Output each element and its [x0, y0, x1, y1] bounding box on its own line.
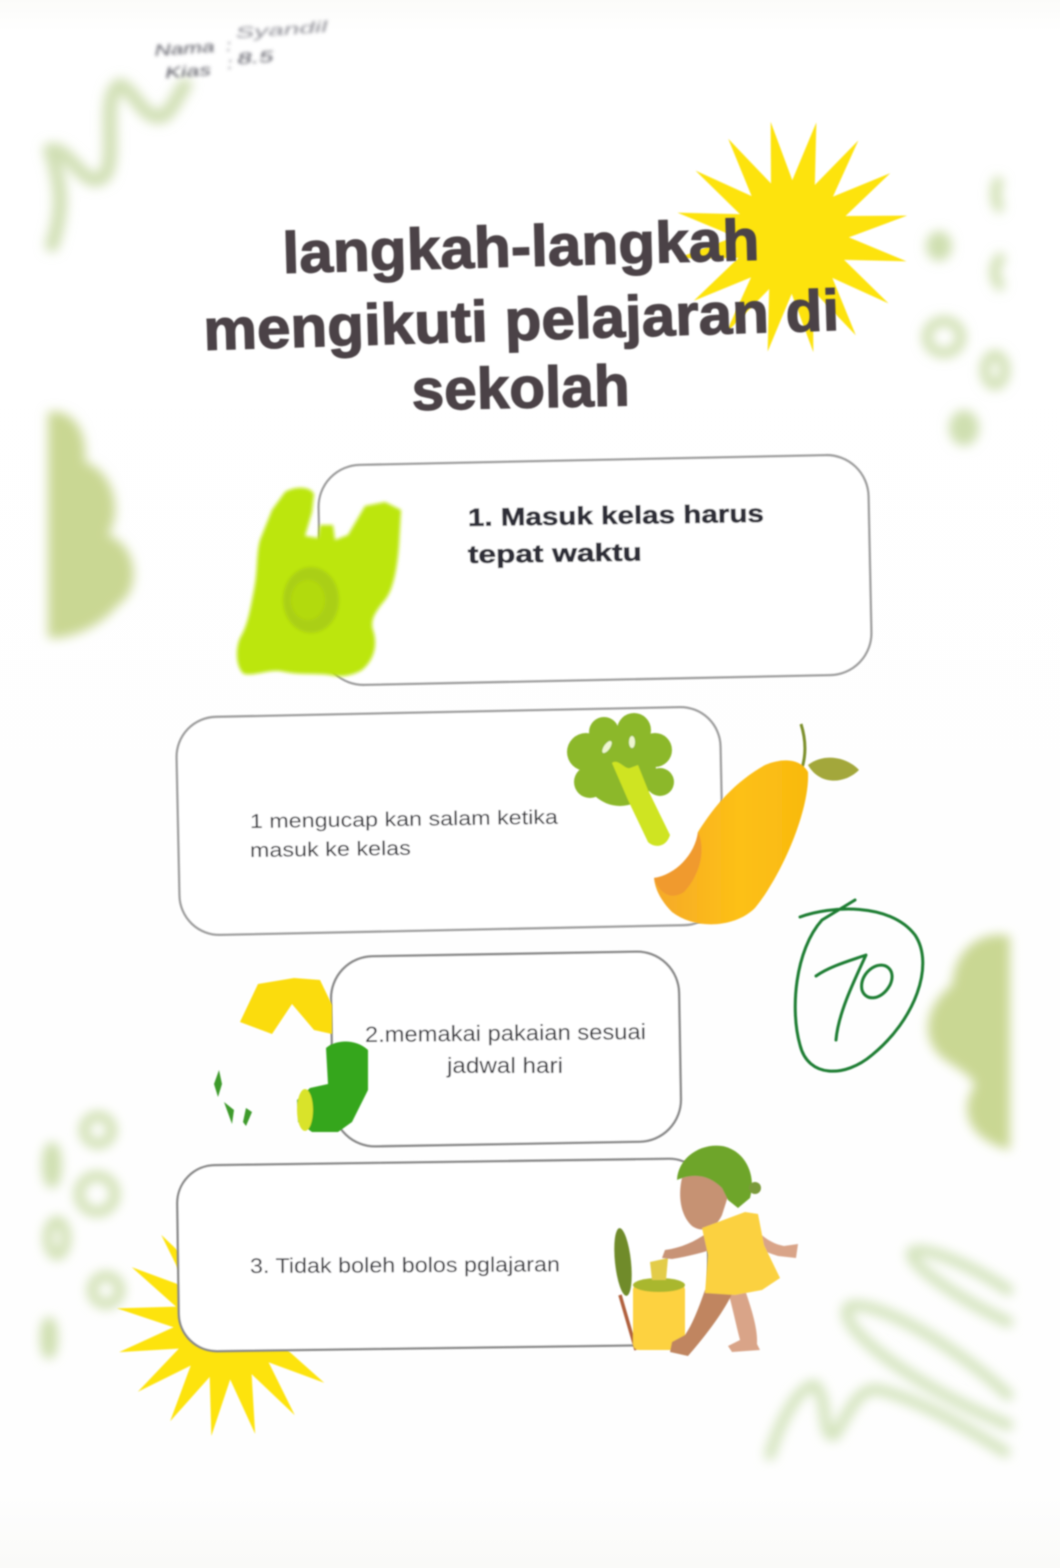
decoration: bottom-right scribble — [770, 1251, 1008, 1455]
decoration: top-left squiggle — [50, 85, 185, 245]
sun: bottom left — [92, 1189, 364, 1461]
text: step 4: 3. Tidak boleh bolos pglajaran — [250, 1253, 560, 1278]
text: step 2 — [250, 807, 559, 862]
decoration: left blob — [48, 412, 134, 638]
decoration: right blob — [928, 935, 1010, 1150]
handwritten name and class: 8.5 — [237, 49, 274, 68]
icon: papaya — [654, 724, 859, 924]
title: mengikuti pelajaran di — [202, 278, 840, 363]
handwritten name and class: : — [227, 56, 233, 73]
decoration: bottom-left rings — [45, 1116, 120, 1354]
text: step 3: jadwal hari — [446, 1053, 563, 1078]
handwritten name and class: Kias — [165, 62, 212, 82]
text: step 1: 1. Masuk kelas harus — [468, 500, 764, 532]
text: step 2: masuk ke kelas — [250, 838, 411, 862]
icon: broccoli — [567, 713, 674, 846]
title: langkah-langkah — [282, 208, 760, 286]
text: step 3: 2.memakai pakaian sesuai — [365, 1019, 646, 1047]
text: step 3 — [365, 1019, 646, 1078]
text: step 1: tepat waktu — [468, 539, 642, 569]
handwritten name and class: Nama — [154, 39, 215, 60]
handwritten name and class: : — [226, 38, 231, 55]
panel: step 4 — [177, 1158, 709, 1352]
decoration: right rings and dots — [926, 178, 1005, 446]
panel: step 3 — [330, 951, 682, 1147]
text: step 1 — [468, 500, 764, 569]
sun: top right — [653, 98, 931, 376]
illustration: girl throwing rubbish into bin — [611, 1146, 798, 1356]
text: step 2: 1 mengucap kan salam ketika — [250, 807, 559, 833]
grade: 70 in circle — [795, 900, 923, 1071]
handwritten name and class: Syandil — [235, 19, 329, 42]
title: sekolah — [411, 353, 630, 423]
handwritten name and class — [153, 19, 331, 83]
icon: green plastic bag — [237, 488, 401, 676]
title — [202, 208, 840, 423]
panel: step 2 — [176, 706, 724, 936]
icon: recycling arrows — [214, 978, 368, 1132]
panel: step 1 — [318, 454, 872, 686]
